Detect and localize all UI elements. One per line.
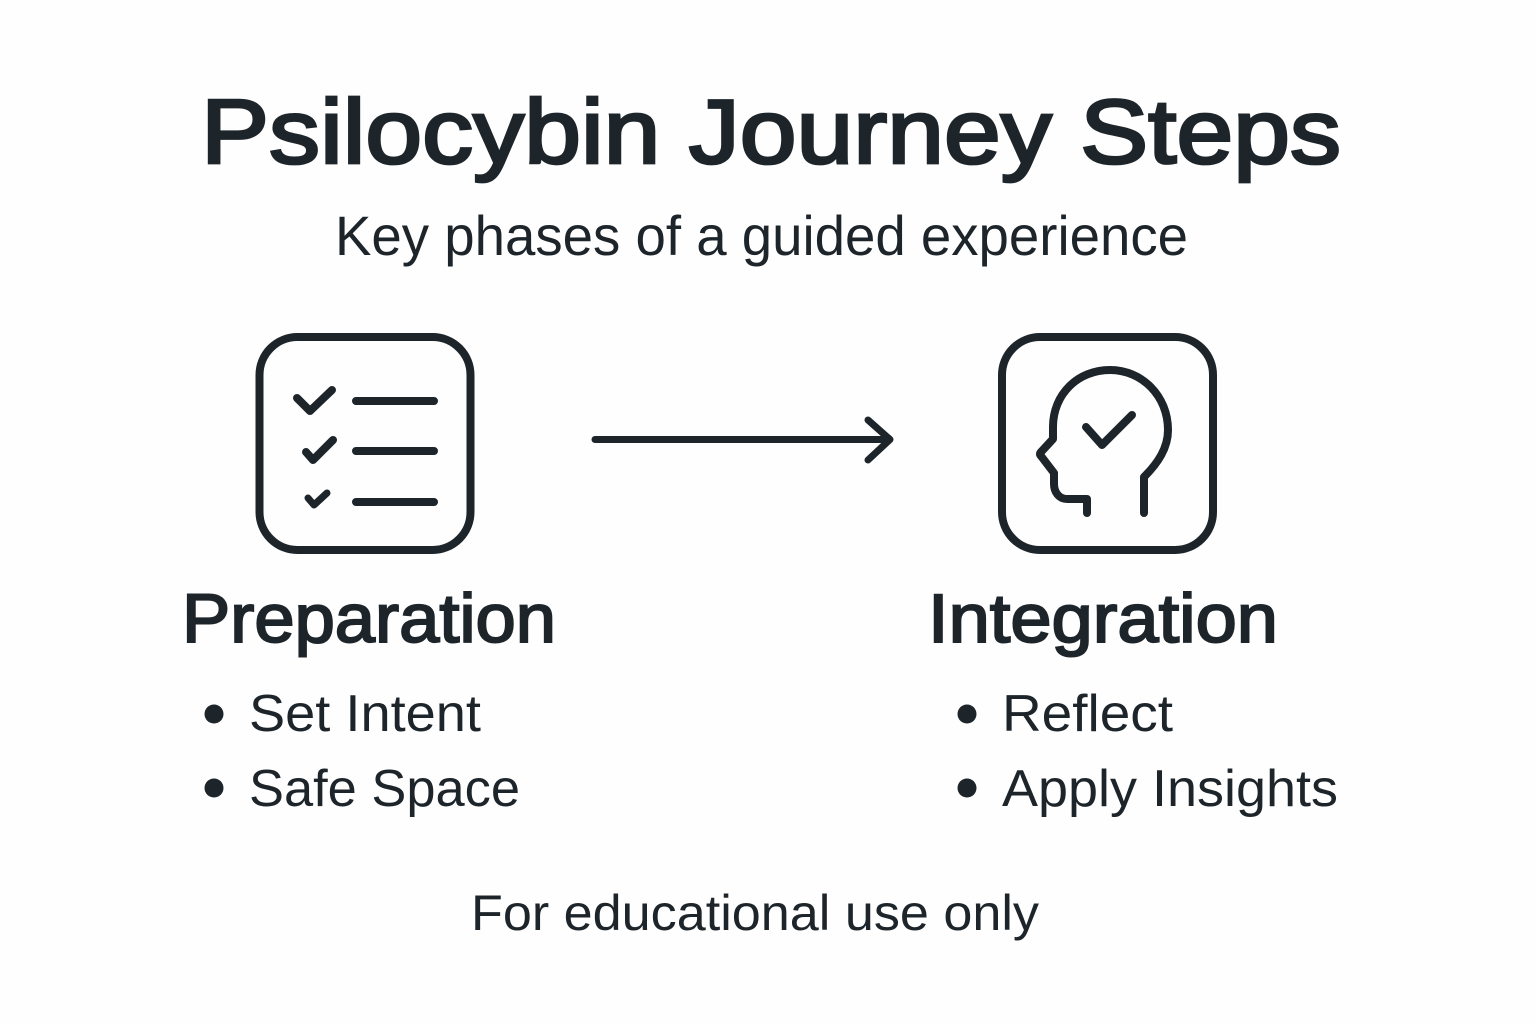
panel: preparation	[182, 337, 556, 818]
panel: integration	[928, 337, 1338, 818]
footer note: For educational use only	[471, 885, 1039, 941]
arrow: preparation to integration	[595, 420, 890, 460]
bullet list: integration: Reflect	[1002, 685, 1174, 743]
subtitle: Key phases of a guided experience	[335, 204, 1188, 267]
heading: preparation: Preparation	[182, 580, 556, 657]
heading: integration: Integration	[928, 580, 1278, 657]
bullet list: preparation: Set Intent	[249, 685, 482, 743]
title: Psilocybin Journey Steps	[201, 82, 1341, 183]
bullet list: integration	[958, 685, 1338, 818]
icon: head with checkmark	[1002, 337, 1213, 550]
bullet list: preparation	[204, 685, 520, 818]
bullet list: preparation: Safe Space	[249, 760, 520, 818]
icon: checklist	[260, 337, 470, 550]
bullet list: integration: Apply Insights	[1002, 760, 1338, 818]
